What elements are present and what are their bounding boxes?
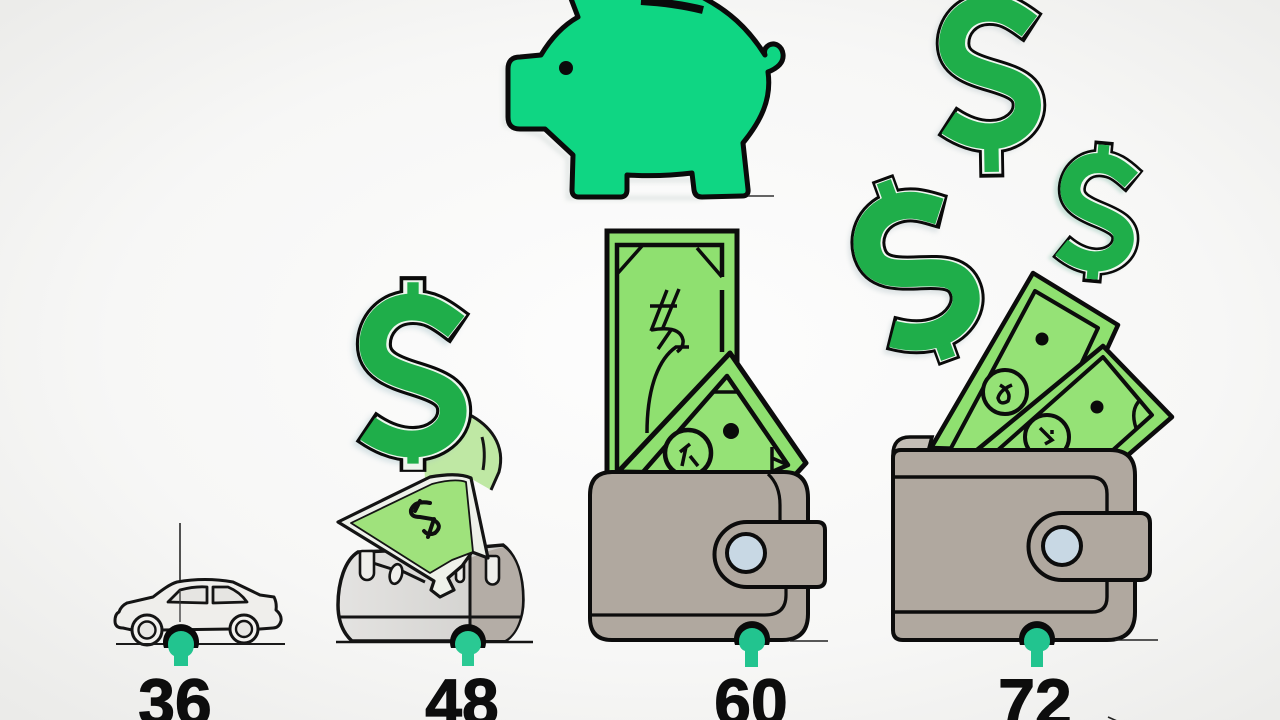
wallet clasp	[1028, 513, 1150, 580]
light green bill behind dollar	[424, 414, 501, 490]
banknote corners	[618, 246, 722, 277]
banknote seal	[665, 430, 711, 476]
wallet back flap	[893, 437, 932, 455]
handbag body	[338, 545, 523, 641]
car vertical line over door	[179, 590, 181, 622]
car front hub	[236, 621, 252, 637]
pin marker 48	[450, 624, 486, 666]
pin marker 72	[1019, 621, 1055, 667]
rear seal mark	[998, 385, 1012, 403]
wallet clasp	[714, 522, 825, 587]
handbag ground line	[336, 641, 533, 643]
car antenna line	[179, 523, 181, 622]
group: handbag with banknote at 48 months	[336, 414, 533, 642]
pin marker 60	[734, 621, 770, 667]
small arrow mark	[1108, 717, 1117, 720]
rear banknote	[931, 273, 1118, 452]
icon: dollar sign small right	[1053, 138, 1138, 286]
wallet ground line	[1115, 639, 1158, 641]
front banknote dot	[1090, 400, 1104, 414]
front banknote corner	[1134, 400, 1140, 428]
piggy ground line	[748, 195, 774, 197]
group: car at 36 months	[115, 523, 285, 645]
handbag seams	[339, 550, 521, 641]
banknote green face	[351, 480, 473, 573]
banknote inner frame	[617, 245, 722, 475]
car front wheel	[230, 615, 258, 643]
upright banknote	[607, 231, 737, 475]
banknote dollar mark	[411, 501, 439, 537]
front banknote	[977, 346, 1172, 462]
wallet button	[1043, 527, 1081, 565]
rear banknote dot	[1036, 332, 1048, 346]
handbag handle cord	[373, 563, 425, 582]
wallet inner fold	[893, 477, 1107, 612]
wallet inner fold	[590, 474, 786, 615]
tilted banknote	[618, 353, 806, 476]
piggy coin slot	[641, 1, 703, 10]
front banknote seal	[1025, 415, 1069, 459]
front seal mark	[1040, 428, 1052, 444]
pin marker 36	[163, 624, 199, 666]
banknote over handbag	[338, 475, 488, 597]
seal mark	[680, 444, 698, 466]
piggy eye	[559, 61, 573, 75]
wallet button	[727, 534, 765, 572]
group: wallet with banknotes at 72 months	[893, 273, 1172, 640]
car body	[115, 580, 281, 630]
icon: dollar sign at 48 months	[362, 276, 460, 472]
icon: piggy bank	[505, 0, 783, 198]
banknote dot	[723, 423, 739, 439]
wallet body	[590, 472, 808, 640]
icon: dollar sign left tilted	[835, 162, 993, 379]
car windows	[168, 587, 247, 603]
handbag handle loops	[360, 551, 499, 584]
tilted banknote corner	[712, 392, 788, 472]
banknote sign scribble	[647, 289, 689, 433]
icon: dollar sign large top	[940, 0, 1036, 178]
group: wallet with banknotes at 60 months	[590, 231, 828, 641]
wallet ground line	[790, 640, 828, 642]
handbag middle loop	[388, 563, 404, 585]
rear banknote seal	[983, 370, 1027, 414]
car rear wheel	[132, 615, 162, 645]
bill back outline	[468, 414, 501, 490]
handbag darker side	[470, 547, 522, 640]
wallet body	[893, 450, 1135, 640]
car ground line	[116, 643, 285, 645]
car rear hub	[138, 622, 156, 638]
